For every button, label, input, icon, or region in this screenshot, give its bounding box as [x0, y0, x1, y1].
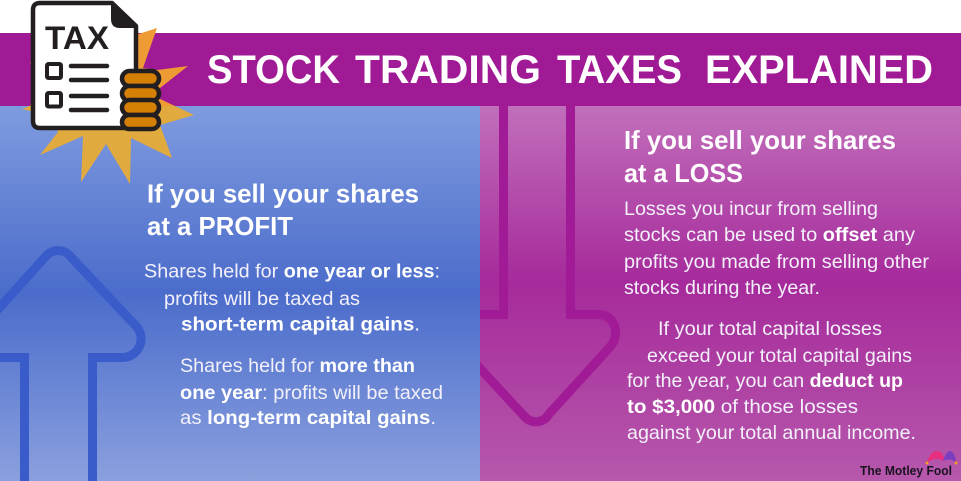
icon: tax document: TAX — [45, 20, 110, 56]
text block: short-term gains — [144, 260, 440, 336]
text block: long-term gains: Shares held for more than — [180, 355, 415, 377]
heading: profit: If you sell your shares — [147, 178, 419, 208]
text block: deduct up to $3,000: for the year, you can deduct up — [627, 370, 903, 392]
title — [207, 48, 933, 92]
title: STOCK — [207, 48, 340, 92]
text block: deduct up to $3,000: If your total capital losses — [658, 318, 882, 340]
heading: loss: If you sell your shares — [624, 125, 896, 155]
icon: tax document — [33, 2, 159, 129]
text block: deduct up to $3,000: against your total annual income. — [627, 422, 916, 444]
text block: long-term gains — [180, 355, 443, 429]
heading: loss — [624, 125, 896, 188]
heading: profit — [147, 178, 419, 241]
panel: profit background — [0, 106, 480, 481]
text block: deduct up to $3,000: to $3,000 of those losses — [627, 396, 858, 418]
heading: profit: at a PROFIT — [147, 211, 293, 241]
icon: coin stack — [122, 71, 159, 129]
text block: offset profits: Losses you incur from selling — [624, 198, 878, 220]
text block: offset profits: profits you made from selling other — [624, 251, 930, 273]
text block: long-term gains: as long-term capital gains . — [180, 407, 436, 429]
text block: short-term gains: profits will be taxed as — [164, 288, 360, 310]
arrow: up arrow outline — [0, 250, 141, 481]
text block: deduct up to $3,000: exceed your total capital gains — [647, 345, 912, 367]
text block: offset profits — [624, 198, 930, 299]
title: TAXES — [557, 48, 682, 92]
title: TRADING — [355, 48, 541, 92]
text block: deduct up to $3,000 — [627, 318, 916, 444]
text block: short-term gains: short-term capital gains . — [181, 314, 420, 336]
arrow: down arrow outline — [476, 100, 616, 422]
logo: The Motley Fool: The Motley Fool — [860, 463, 952, 478]
title: EXPLAINED — [705, 48, 933, 92]
text block: offset profits: stocks can be used to offset any — [624, 224, 915, 246]
icon: starburst — [22, 28, 194, 184]
text block: offset profits: stocks during the year. — [624, 277, 820, 299]
logo: The Motley Fool — [860, 451, 958, 478]
banner — [0, 33, 961, 106]
text block: long-term gains: one year: profits will be taxed — [180, 382, 443, 404]
text block: short-term gains: Shares held for one year or less: — [144, 260, 440, 282]
panel: loss background — [480, 106, 961, 481]
heading: loss: at a LOSS — [624, 158, 743, 188]
